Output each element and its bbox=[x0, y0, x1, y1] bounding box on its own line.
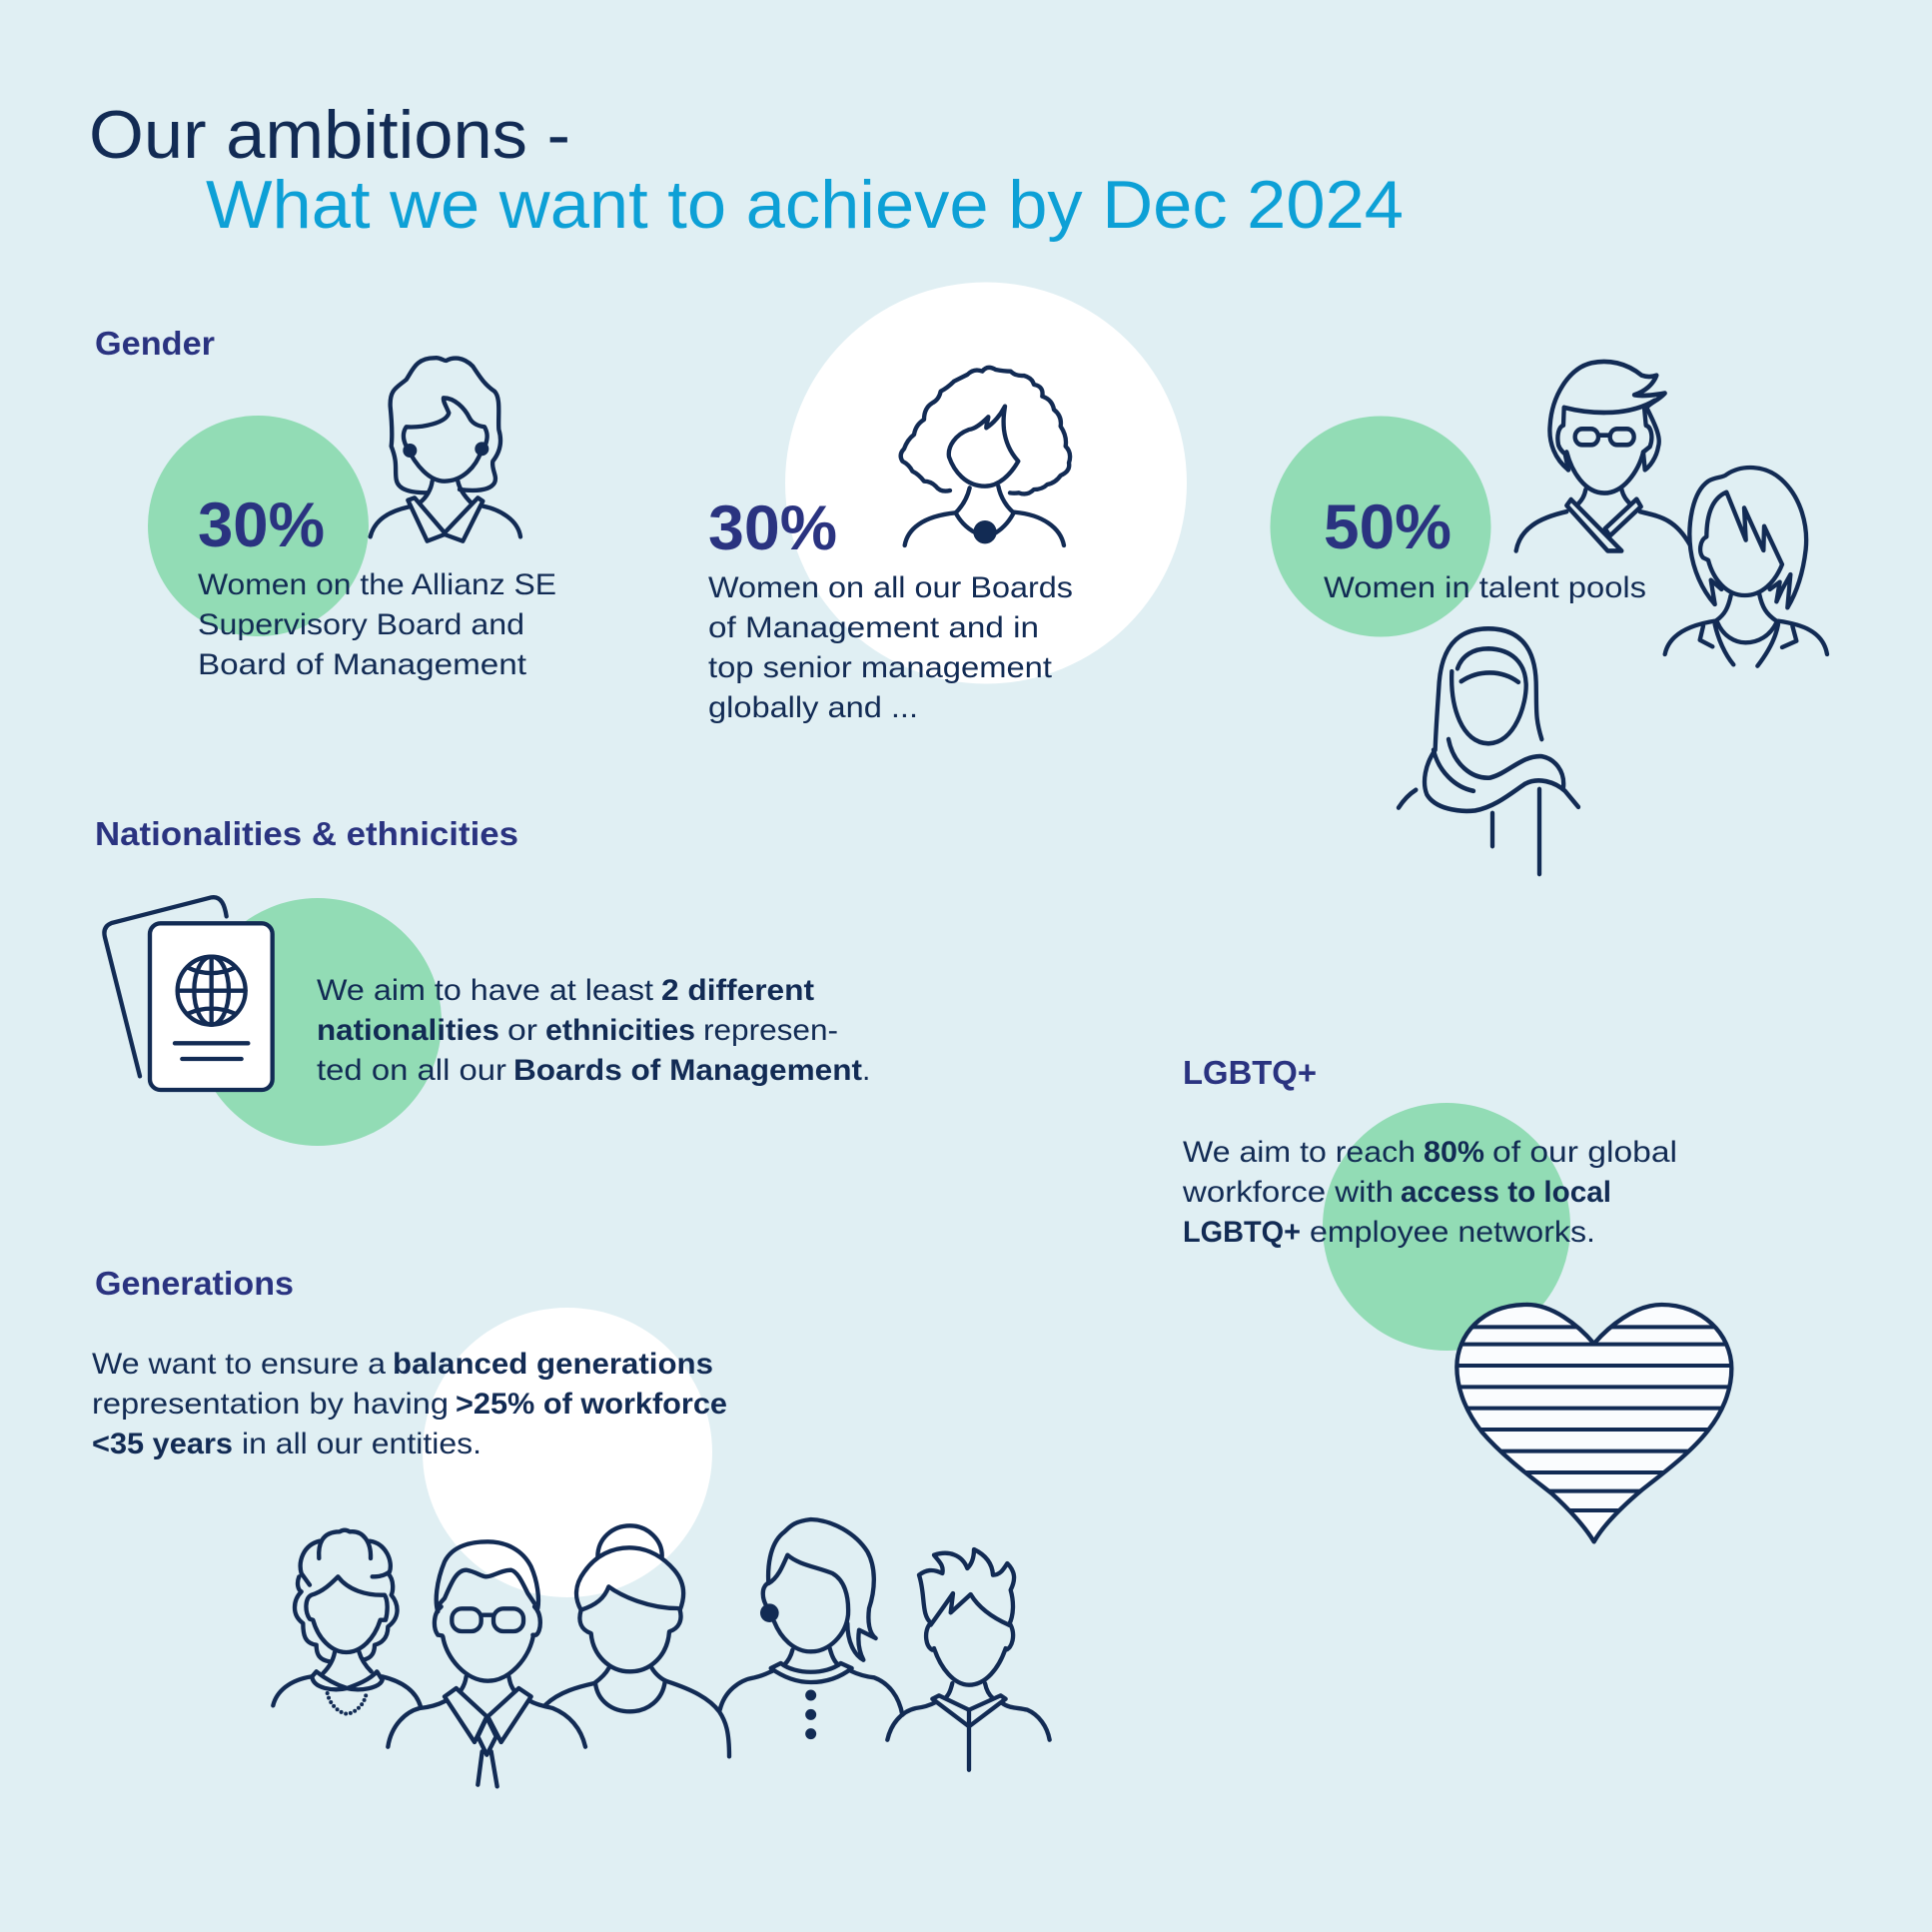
text: nationalities paragraph: represen- bbox=[703, 1014, 838, 1047]
text: generations paragraph: representation by having bbox=[92, 1388, 449, 1421]
text: LGBTQ+ paragraph: We aim to reach bbox=[1183, 1136, 1416, 1169]
text: LGBTQ+ paragraph bbox=[1182, 1136, 1677, 1249]
text: nationalities paragraph: We aim to have at least bbox=[317, 974, 654, 1007]
white circle bbox=[423, 1308, 712, 1597]
text: talent pools: Women in talent pools bbox=[1324, 571, 1646, 604]
text: nationalities paragraph: 2 different bbox=[661, 974, 814, 1007]
green circle bbox=[194, 898, 442, 1146]
text: nationalities paragraph: ted on all our bbox=[317, 1054, 506, 1087]
text: supervisory board: Board of Management bbox=[198, 648, 527, 681]
text: supervisory board: Supervisory Board and bbox=[198, 608, 524, 641]
text: boards of management: Women on all our Boards bbox=[708, 571, 1073, 604]
green circle bbox=[1323, 1103, 1570, 1351]
text: generations paragraph: in all our entities. bbox=[242, 1428, 482, 1460]
icon: three people bbox=[1399, 362, 1827, 874]
text: supervisory board bbox=[198, 568, 556, 681]
heading: nationalities: Nationalities & ethnicities bbox=[95, 815, 518, 852]
title: What we want to achieve by Dec 2024 bbox=[206, 167, 1404, 243]
text: generations paragraph: >25% of workforce bbox=[456, 1388, 727, 1421]
text: generations paragraph: balanced generations bbox=[393, 1348, 713, 1381]
text: generations paragraph: <35 years bbox=[92, 1428, 233, 1460]
text: nationalities paragraph bbox=[317, 974, 870, 1087]
text: nationalities paragraph: Boards of Management bbox=[513, 1054, 862, 1087]
icon: woman with earring, young man bbox=[720, 1519, 1050, 1770]
text: LGBTQ+ paragraph: access to local bbox=[1401, 1176, 1611, 1209]
text: generations paragraph bbox=[92, 1348, 727, 1460]
panel: generations bbox=[92, 1265, 1050, 1786]
text: LGBTQ+ paragraph: workforce with bbox=[1182, 1176, 1394, 1209]
heading: LGBTQ+: LGBTQ+ bbox=[1183, 1054, 1317, 1091]
text: LGBTQ+ paragraph: LGBTQ+ bbox=[1183, 1216, 1301, 1249]
text: boards of management bbox=[708, 571, 1073, 724]
heading: gender: Gender bbox=[95, 325, 215, 362]
panel: LGBTQ+ bbox=[1182, 1054, 1738, 1541]
text: nationalities paragraph: or bbox=[507, 1014, 537, 1047]
text: generations paragraph: We want to ensure a bbox=[92, 1348, 386, 1381]
panel: gender bbox=[95, 282, 1827, 874]
text: LGBTQ+ paragraph: employee networks. bbox=[1310, 1216, 1595, 1249]
text: boards of management: of Management and in bbox=[708, 611, 1039, 644]
panel: nationalities and ethnicities bbox=[95, 815, 870, 1146]
text: nationalities paragraph: nationalities bbox=[317, 1014, 499, 1047]
icon: older woman, man with glasses, woman with bun bbox=[273, 1525, 729, 1786]
icon: woman with curly hair bbox=[901, 368, 1070, 545]
text: LGBTQ+ paragraph: of our global bbox=[1492, 1136, 1677, 1169]
text: LGBTQ+ paragraph: 80% bbox=[1424, 1136, 1484, 1169]
title bbox=[89, 97, 1404, 243]
icon: passport bbox=[104, 897, 273, 1090]
text: nationalities paragraph: ethnicities bbox=[545, 1014, 695, 1047]
stat: 30% supervisory board: 30% bbox=[198, 490, 325, 560]
text: boards of management: globally and ... bbox=[708, 691, 918, 724]
text: supervisory board: Women on the Allianz SE bbox=[198, 568, 556, 601]
stat: 50%: 50% bbox=[1324, 492, 1451, 562]
heading: generations: Generations bbox=[95, 1265, 294, 1302]
icon: woman with wavy hair bbox=[371, 358, 520, 541]
text: nationalities paragraph: . bbox=[862, 1054, 870, 1087]
white circle bbox=[785, 282, 1187, 683]
text: boards of management: top senior management bbox=[708, 651, 1053, 684]
green circle 3 bbox=[1271, 416, 1490, 637]
title: Our ambitions - bbox=[89, 97, 570, 173]
green circle 1 bbox=[148, 416, 369, 636]
stat: 30% boards: 30% bbox=[708, 493, 837, 563]
icon: striped heart bbox=[1451, 1305, 1738, 1541]
